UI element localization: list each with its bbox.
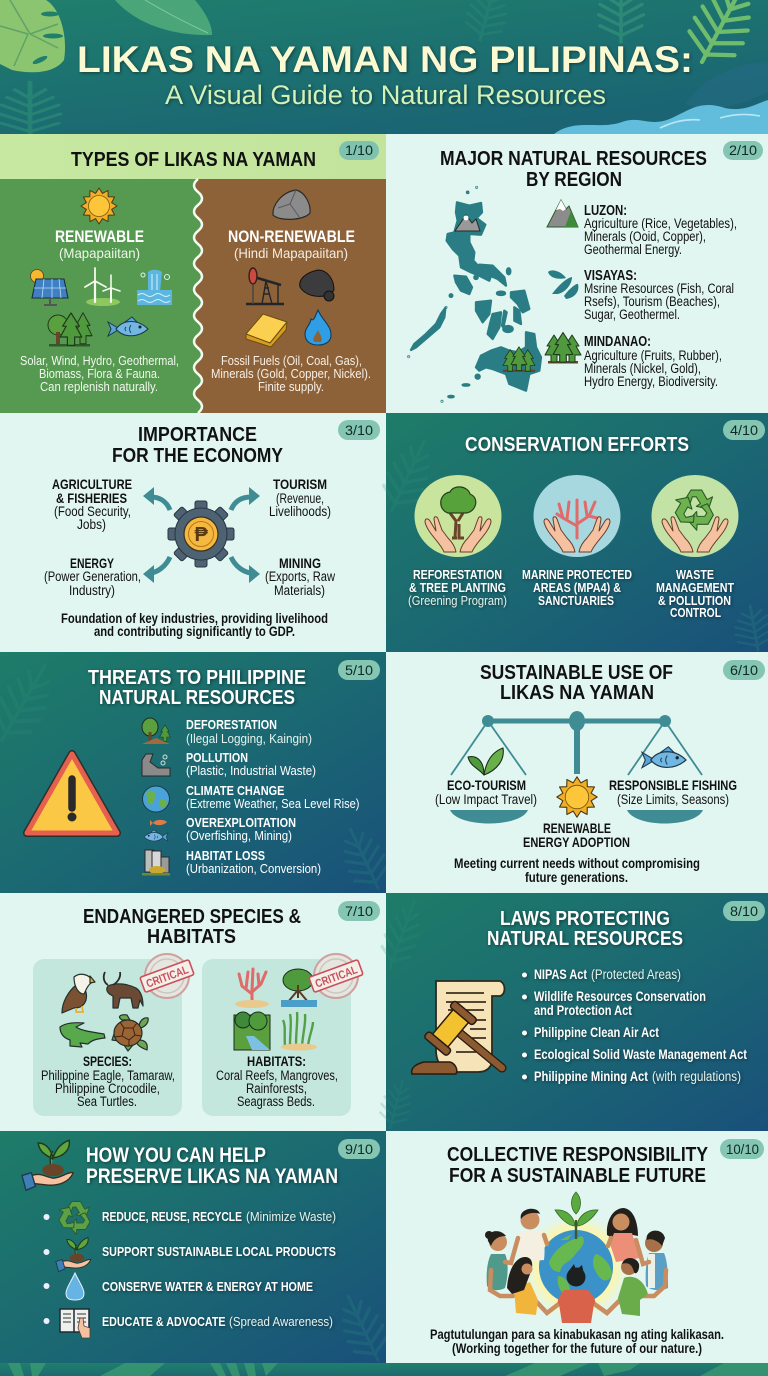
agriculture label: AGRICULTURE [52,476,132,492]
renewable adoption label: ENERGY ADOPTION [523,834,630,850]
habitats text: Seagrass Beds. [237,1094,315,1109]
icon: warning triangle [27,754,117,833]
icon: monstera leaf [0,0,65,72]
visayas legend: Msrine Resources (Fish, Coral [584,281,734,296]
tourism label: (Revenue, [276,491,324,506]
marine label: MARINE PROTECTED [522,567,632,582]
heading: BY REGION [526,168,622,191]
renewable heading: (Mapapaiitan) [59,245,140,261]
icon: critical stamp [309,954,363,998]
icon: palm frond [678,0,766,75]
icon: overfishing [144,820,168,841]
panel: how you can help [0,1131,395,1368]
icon: gold bar [246,314,287,347]
action: educate: (Spread Awareness) [229,1314,333,1329]
habitats text: Coral Reefs, Mangroves, [216,1068,338,1083]
action: conserve water [44,1273,313,1300]
luzon legend: LUZON: [584,203,627,219]
heading [440,147,707,191]
footer band [0,1363,768,1376]
species text: Philippine Eagle, Tamaraw, [41,1068,175,1083]
icon: wind turbines [85,268,120,306]
summary text: and contributing significantly to GDP. [94,624,295,639]
icon: globe [142,786,170,812]
person: white shirt man [517,1209,545,1262]
badge [720,1139,764,1159]
heading: PRESERVE LIKAS NA YAMAN [86,1165,338,1188]
action: sustainable products: SUPPORT SUSTAINABLE LOCAL PRODUCTS [102,1244,336,1259]
climate change text: (Extreme Weather, Sea Level Rise) [186,796,360,811]
luzon legend: Minerals (Ooid, Copper), [584,229,706,244]
habitats text: Rainforests, [246,1081,307,1096]
icon: crocodile [60,1023,105,1047]
heading: COLLECTIVE RESPONSIBILITY [447,1143,708,1166]
badge: 10/10 [726,1141,759,1157]
heading [480,661,673,704]
renewable description: Can replenish naturally. [40,379,158,394]
icon: turtle [112,1015,148,1051]
person: blue shirt man [645,1231,668,1290]
icon: reforestation [414,475,502,557]
reforestation label: (Greening Program) [408,593,507,608]
habitat loss text: (Urbanization, Conversion) [186,861,321,876]
overexploitation text: (Overfishing, Mining) [186,828,292,843]
mindanao legend [545,332,722,389]
header banner [0,0,768,137]
waste label [656,567,734,620]
species text: Sea Turtles. [77,1094,137,1109]
heading [447,1143,708,1187]
reforestation label: REFORESTATION [413,567,502,582]
summary text [61,611,328,639]
renewable heading: RENEWABLE [55,228,144,246]
summary text: Foundation of key industries, providing livelihood [61,611,328,626]
responsible fishing label: RESPONSIBLE FISHING [609,777,737,793]
person: green shirt man [618,1258,648,1316]
habitat loss text [186,848,321,876]
visayas legend: Sugar, Geothermel. [584,307,680,322]
energy label: (Power Generation, [44,569,141,584]
pollution text: POLLUTION [186,750,248,765]
heading: MAJOR NATURAL RESOURCES [440,147,707,170]
subtitle: A Visual Guide to Natural Resources [165,80,606,110]
energy label [44,555,141,598]
renewable description: Biomass, Flora & Fauna. [39,366,160,381]
icon: forest [48,313,92,346]
agriculture label: (Food Security, [54,504,131,519]
habitats text: HABITATS: [247,1054,306,1069]
habitats text [216,1054,338,1109]
action: educate [44,1309,333,1338]
renewable adoption label [523,820,630,850]
badge [338,420,380,440]
non-renewable description: Finite supply. [258,379,324,394]
law list [522,967,747,1084]
marine label: SANCTUARIES [538,593,614,608]
badge [338,660,380,680]
heading [487,907,683,950]
non-renewable description: Fossil Fuels (Oil, Coal, Gas), [221,353,362,368]
badge [723,660,765,680]
badge: 5/10 [345,662,373,678]
non-renewable heading: NON-RENEWABLE [228,228,355,246]
law list: Wildlife Resources Conservation [534,989,706,1004]
luzon legend [547,200,737,257]
heading: LAWS PROTECTING [500,907,670,930]
heading: FOR A SUSTAINABLE FUTURE [449,1164,706,1187]
eco-tourism label: ECO-TOURISM [447,777,526,793]
tourism label [269,476,331,519]
caption: (Working together for the future of our nature.) [452,1341,702,1356]
icon: scroll and gavel [412,981,504,1074]
badge [339,141,379,160]
arms: back ring [490,1235,666,1313]
heading: FOR THE ECONOMY [112,444,283,467]
icon: critical stamp [140,954,194,998]
icon: oil pumpjack [246,268,284,304]
title: LIKAS NA YAMAN NG PILIPINAS: [77,39,693,80]
climate change text: CLIMATE CHANGE [186,783,285,798]
action: conserve water: CONSERVE WATER & ENERGY AT HOME [102,1279,313,1294]
icon: globe [539,1230,613,1304]
waste label: & POLLUTION [658,593,731,608]
icon: rainforest [234,1012,270,1050]
visayas legend [548,268,734,322]
water wave [554,100,768,134]
panel: major natural resources by region [386,134,768,413]
icon: sun [557,777,597,817]
action: sustainable products [44,1238,336,1272]
badge: 7/10 [345,903,373,919]
mindanao legend: Agriculture (Fruits, Rubber), [584,348,722,363]
mindanao legend: MINDANAO: [584,334,651,350]
summary text [454,856,700,885]
deforestation text [186,717,312,746]
illustration: people around globe [485,1192,668,1323]
visayas legend: Rsefs), Tourism (Beaches), [584,294,720,309]
species text: SPECIES: [83,1054,132,1069]
pollution text [186,750,316,778]
icon: tamaraw [104,972,143,1008]
icon: habitat loss [142,850,170,876]
icon: deforestation [142,718,170,744]
agriculture label: & FISHERIES [56,490,127,506]
person: red shirt man [558,1264,595,1323]
law list: and Protection Act [534,1003,632,1018]
renewable adoption label: RENEWABLE [543,820,611,836]
panel: endangered species [0,893,386,1131]
badge [723,141,763,160]
waste label: CONTROL [670,605,721,620]
badge [723,901,765,921]
icon: gas flame [305,310,331,345]
icon: coal [300,270,334,301]
action: reduce reuse recycle: (Minimize Waste) [246,1209,336,1224]
panel: conservation efforts [375,413,768,653]
species text: Philippine Crocodile, [55,1081,160,1096]
waste label: WASTE [676,567,714,582]
heading: SUSTAINABLE USE OF [480,661,673,684]
heading [88,666,306,709]
panel: sustainable use [386,652,768,893]
badge: 2/10 [729,142,757,158]
mining label: MINING [279,555,321,571]
panel: laws [375,893,768,1132]
icon: large leaf [115,0,212,35]
deforestation text: (Ilegal Logging, Kaingin) [186,731,312,746]
reforestation label [408,567,507,608]
badge [338,1139,380,1159]
panel: threats [0,652,395,896]
heading: TYPES OF LIKAS NA YAMAN [71,148,316,171]
responsible fishing label [609,777,737,807]
icon: sprout [555,1192,598,1239]
law list: NIPAS Act [534,967,587,982]
tourism label: Livelihoods) [269,504,331,519]
icon: hand with sprout [22,1140,73,1190]
philippine map [408,187,541,402]
badge [338,901,380,921]
icon: fish [642,747,686,768]
overexploitation text: OVEREXPLOITATION [186,815,296,830]
action: reduce reuse recycle: REDUCE, REUSE, RECYCLE [102,1209,242,1224]
mining label [265,555,335,598]
mining label: Materials) [274,583,325,598]
overexploitation text [186,815,296,843]
luzon legend: Agriculture (Rice, Vegetables), [584,216,737,231]
tourism label: TOURISM [273,476,327,492]
law list: (Protected Areas) [591,967,681,982]
heading: NATURAL RESOURCES [99,686,295,709]
arrows [143,487,260,583]
icon: marine protected area [534,475,620,557]
marine label [522,567,632,608]
renewable heading [55,228,144,261]
heading: HOW YOU CAN HELP [86,1144,266,1167]
icon: gear with peso coin: ₱ [194,524,208,546]
icon: dark leaf [686,62,768,108]
heading [112,423,283,467]
summary text: future generations. [525,870,628,885]
badge: 1/10 [345,142,373,158]
responsible fishing label: (Size Limits, Seasons) [617,792,729,807]
person: teal shirt woman [485,1231,508,1290]
agriculture label [52,476,132,532]
heading: CONSERVATION EFFORTS [465,433,689,456]
icon: waterfall [137,270,172,305]
waste label: MANAGEMENT [656,580,734,595]
badge: 9/10 [345,1141,373,1157]
panel: collective responsibility [386,1131,768,1363]
mining label: (Exports, Raw [265,569,335,584]
pollution text: (Plastic, Industrial Waste) [186,763,316,778]
habitats card [202,954,363,1116]
icon: critical stamp: CRITICAL [314,964,359,991]
non-renewable description [211,353,371,394]
luzon legend: Geothermal Energy. [584,242,682,257]
law list: (with regulations) [652,1069,741,1084]
summary text: Meeting current needs without compromising [454,856,700,871]
species card [33,954,194,1116]
panel: importance for the economy [0,413,386,652]
icon: leaf [468,748,503,775]
person: pink shirt woman [607,1208,640,1262]
heading: LIKAS NA YAMAN [500,681,654,704]
deforestation text: DEFORESTATION [186,717,277,732]
heading: ENDANGERED SPECIES & [83,905,301,928]
habitat loss text: HABITAT LOSS [186,848,265,863]
heading [83,905,301,948]
marine label: AREAS (MPA4) & [533,580,621,595]
heading: HABITATS [147,925,236,948]
icon: mangrove [281,969,317,1007]
badge: 8/10 [730,903,758,919]
badge: 4/10 [730,422,758,438]
person: yellow shirt woman [507,1257,538,1315]
icon: rock [273,190,310,219]
renewable description: Solar, Wind, Hydro, Geothermal, [20,353,179,368]
icon: map forest [503,347,535,372]
mindanao legend: Hydro Energy, Biodiversity. [584,374,718,389]
heading [86,1144,338,1188]
action: reduce reuse recycle [44,1202,336,1237]
panel: types of likas na yaman [0,134,386,413]
action: educate: EDUCATE & ADVOCATE [102,1314,226,1329]
law list: Philippine Clean Air Act [534,1025,659,1040]
renewable description [20,353,179,394]
icon: balance scale [450,711,703,824]
species text [41,1054,175,1109]
eco-tourism label [435,777,537,807]
icon: waste management [652,475,738,557]
badge [723,420,765,440]
mindanao legend: Minerals (Nickel, Gold), [584,361,701,376]
agriculture label: Jobs) [77,517,106,532]
energy label: ENERGY [70,555,114,571]
icon: pollution [142,754,170,776]
heading: THREATS TO PHILIPPINE [88,666,306,689]
badge: 6/10 [730,662,758,678]
icon: sun [81,188,117,224]
badge: 3/10 [345,422,373,438]
eco-tourism label: (Low Impact Travel) [435,792,537,807]
non-renewable heading [228,228,355,261]
heading: IMPORTANCE [138,423,257,446]
icon: seagrass [281,1012,317,1050]
law list: Philippine Mining Act [534,1069,648,1084]
reforestation label: & TREE PLANTING [409,580,506,595]
icon: eagle [62,974,95,1013]
visayas legend: VISAYAS: [584,268,637,284]
non-renewable description: Minerals (Gold, Copper, Nickel). [211,366,371,381]
non-renewable heading: (Hindi Mapapaiitan) [234,245,348,261]
energy label: Industry) [69,583,115,598]
icon: fish [108,317,148,336]
icon: solar panel [30,270,68,305]
icon: critical stamp: CRITICAL [145,964,190,991]
heading: NATURAL RESOURCES [487,927,683,950]
caption [430,1327,724,1356]
icon: map mountain [455,215,480,231]
icon: coral [235,969,269,1008]
climate change text [186,783,360,811]
icon: gear with peso coin [168,501,234,567]
